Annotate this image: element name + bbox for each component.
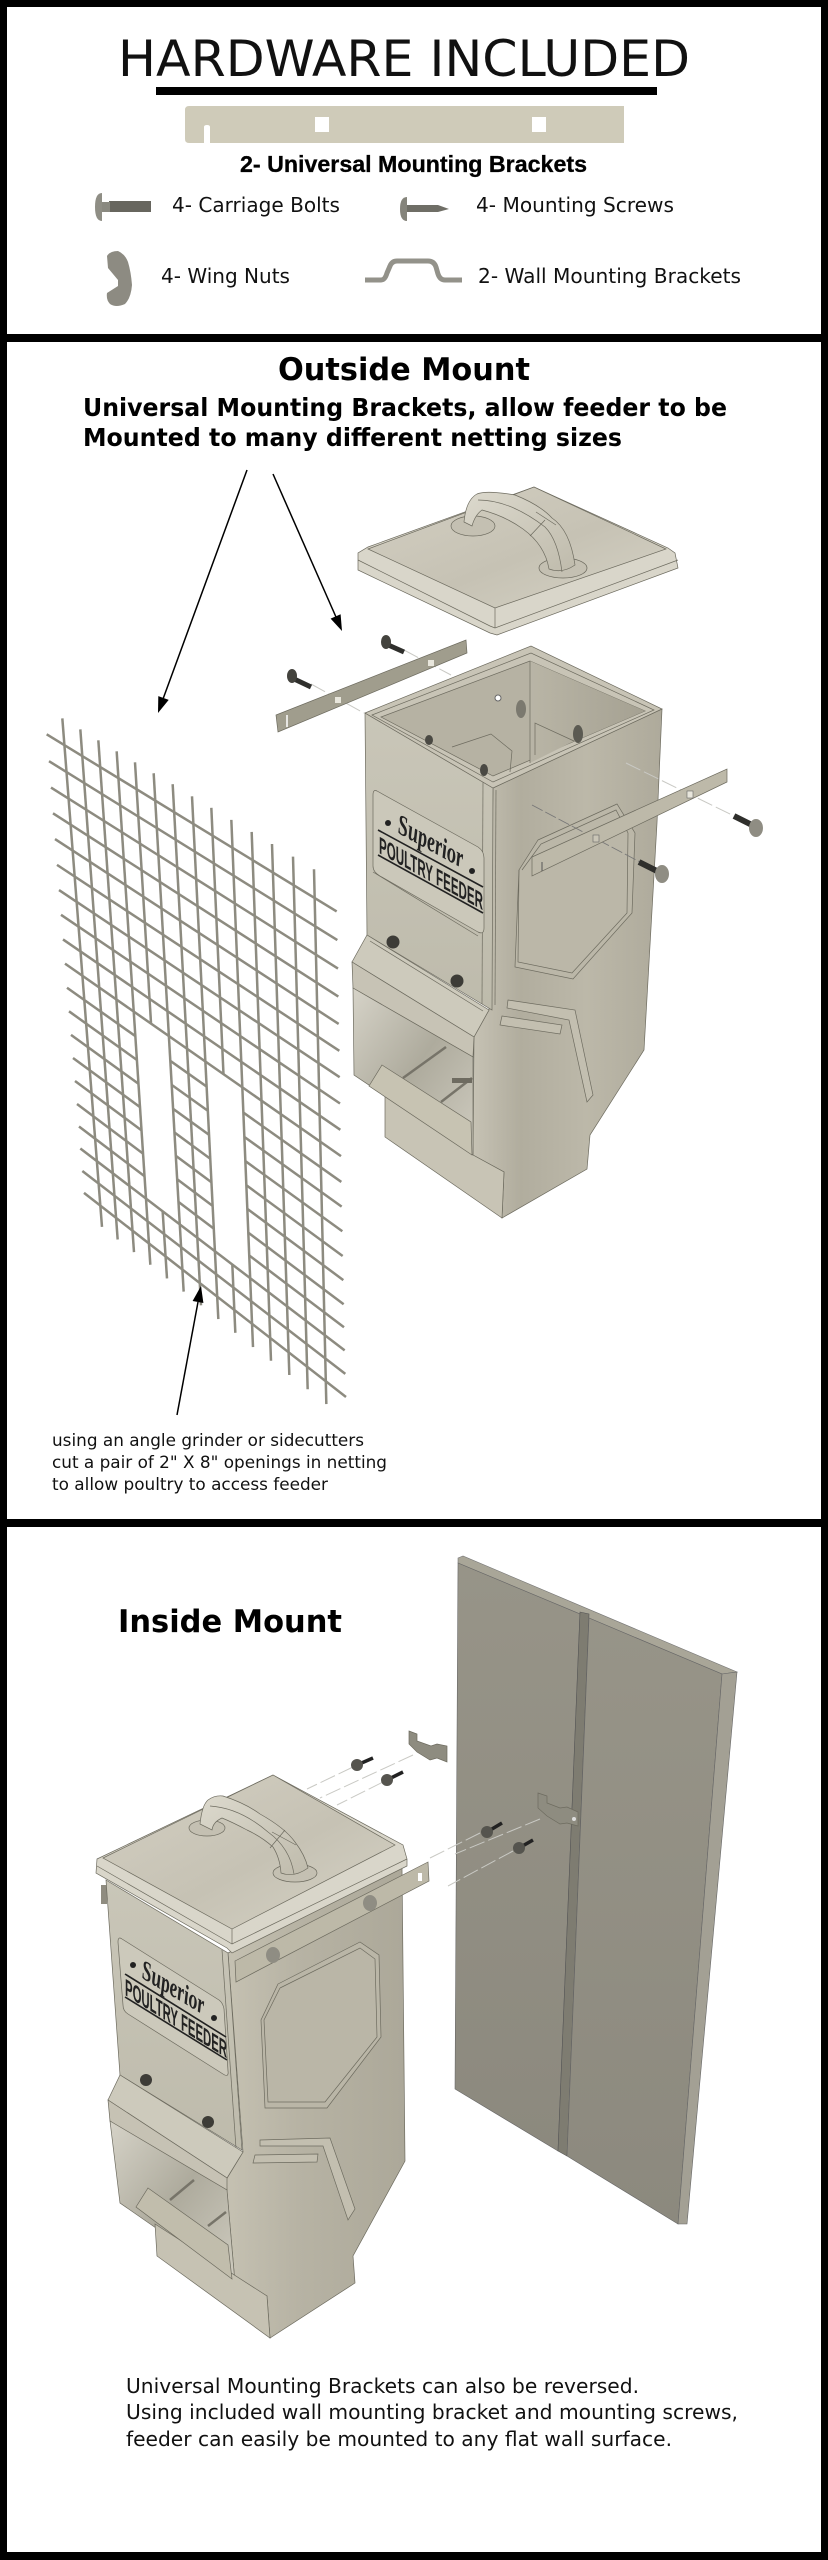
heading: inside mount: Inside Mount [118, 1604, 342, 1640]
title underline [156, 87, 657, 95]
mounting screws [351, 1758, 533, 1854]
left mounting bracket [276, 640, 467, 732]
label: mounting screws: 4- Mounting Screws [476, 193, 674, 217]
feeder: inside mount: POULTRY FEEDER [125, 1973, 227, 2064]
icon: carriage bolt [95, 193, 151, 221]
front bolts [386, 936, 464, 988]
side ribs [253, 2138, 355, 2220]
logo panel: Superior [398, 806, 463, 875]
wall bracket: exploded [409, 1731, 447, 1762]
text: universal brackets description: Universal Mounting Brackets, allow feeder to be [83, 393, 727, 422]
bolts: right bracket [639, 816, 763, 883]
hood [352, 935, 489, 1057]
tray [369, 1065, 472, 1155]
bolts: left bracket [287, 635, 404, 687]
lid [96, 1775, 407, 1953]
feeder body: outside mount [352, 646, 662, 1218]
inner wing nuts [516, 700, 526, 718]
text: universal brackets description: Mounted to many different netting sizes [83, 423, 622, 452]
text: netting instructions [52, 1431, 387, 1495]
text: netting instructions: to allow poultry to access feeder [52, 1475, 328, 1495]
logo panel: Superior [142, 1952, 204, 2022]
lower trough [155, 2224, 270, 2338]
interior and rim [365, 646, 662, 788]
dashed alignment lines [307, 1755, 540, 1886]
text: reversible bracket description: feeder can easily be mounted to any flat wall surface. [126, 2427, 672, 2451]
lid handle [451, 492, 587, 578]
icon: wall mounting bracket [365, 261, 462, 280]
panel: hardware included [7, 7, 821, 334]
logo panel [118, 1938, 228, 2075]
panel: outside mount [7, 342, 821, 1519]
mounting tab [101, 1885, 107, 1904]
left face [365, 713, 493, 1010]
left face [106, 1880, 242, 2150]
arrow: to netting cut [177, 1286, 203, 1415]
feeder: inside mount [96, 1775, 429, 2338]
feed opening [110, 2121, 235, 2283]
label: wall mounting brackets: 2- Wall Mounting Brackets [478, 264, 741, 288]
side panel octagon [515, 804, 635, 979]
feed opening [353, 988, 473, 1155]
icon: universal mounting bracket [185, 106, 624, 143]
label: wing nuts: 4- Wing Nuts [161, 264, 290, 288]
front bolts [140, 2074, 214, 2128]
right face [226, 1868, 405, 2338]
wall panels [455, 1556, 737, 2224]
text: reversible bracket description [126, 2374, 738, 2451]
label: carriage bolts: 4- Carriage Bolts [172, 193, 340, 217]
panel: inside mount [7, 1527, 821, 2552]
text: reversible bracket description: Using included wall mounting bracket and mounting screws, [126, 2400, 738, 2424]
feeder body: outside mount: POULTRY FEEDER [379, 832, 483, 916]
arrow: to bracket [273, 474, 342, 631]
icon: mounting screw [400, 197, 449, 221]
lid handle [189, 1796, 317, 1882]
right mounting bracket [532, 769, 727, 876]
text: reversible bracket description: Universal Mounting Brackets can also be reversed. [126, 2374, 639, 2398]
mounting bracket [235, 1862, 429, 1982]
side panel octagon [261, 1942, 381, 2108]
arrow: to netting [158, 470, 247, 713]
icon: wing nut [107, 251, 132, 306]
text: netting instructions: cut a pair of 2" X 8" openings in netting [52, 1453, 387, 1473]
right face [473, 709, 662, 1218]
tray [136, 2188, 232, 2279]
text: universal brackets description [83, 393, 727, 452]
dashed alignment lines [311, 650, 734, 862]
hood [108, 2075, 243, 2200]
heading: outside mount: Outside Mount [278, 352, 530, 388]
side ribs [500, 1000, 593, 1102]
feeder lid [358, 487, 678, 635]
wall bracket: on wall [538, 1793, 578, 1826]
lower trough [385, 1095, 504, 1218]
logo panel [373, 790, 484, 936]
text: netting instructions: using an angle grinder or sidecutters [52, 1431, 364, 1451]
title: hardware included: HARDWARE INCLUDED [118, 30, 690, 88]
wire netting with two openings [47, 718, 346, 1404]
label: universal mounting brackets: 2- Universal Mounting Brackets [240, 151, 587, 177]
